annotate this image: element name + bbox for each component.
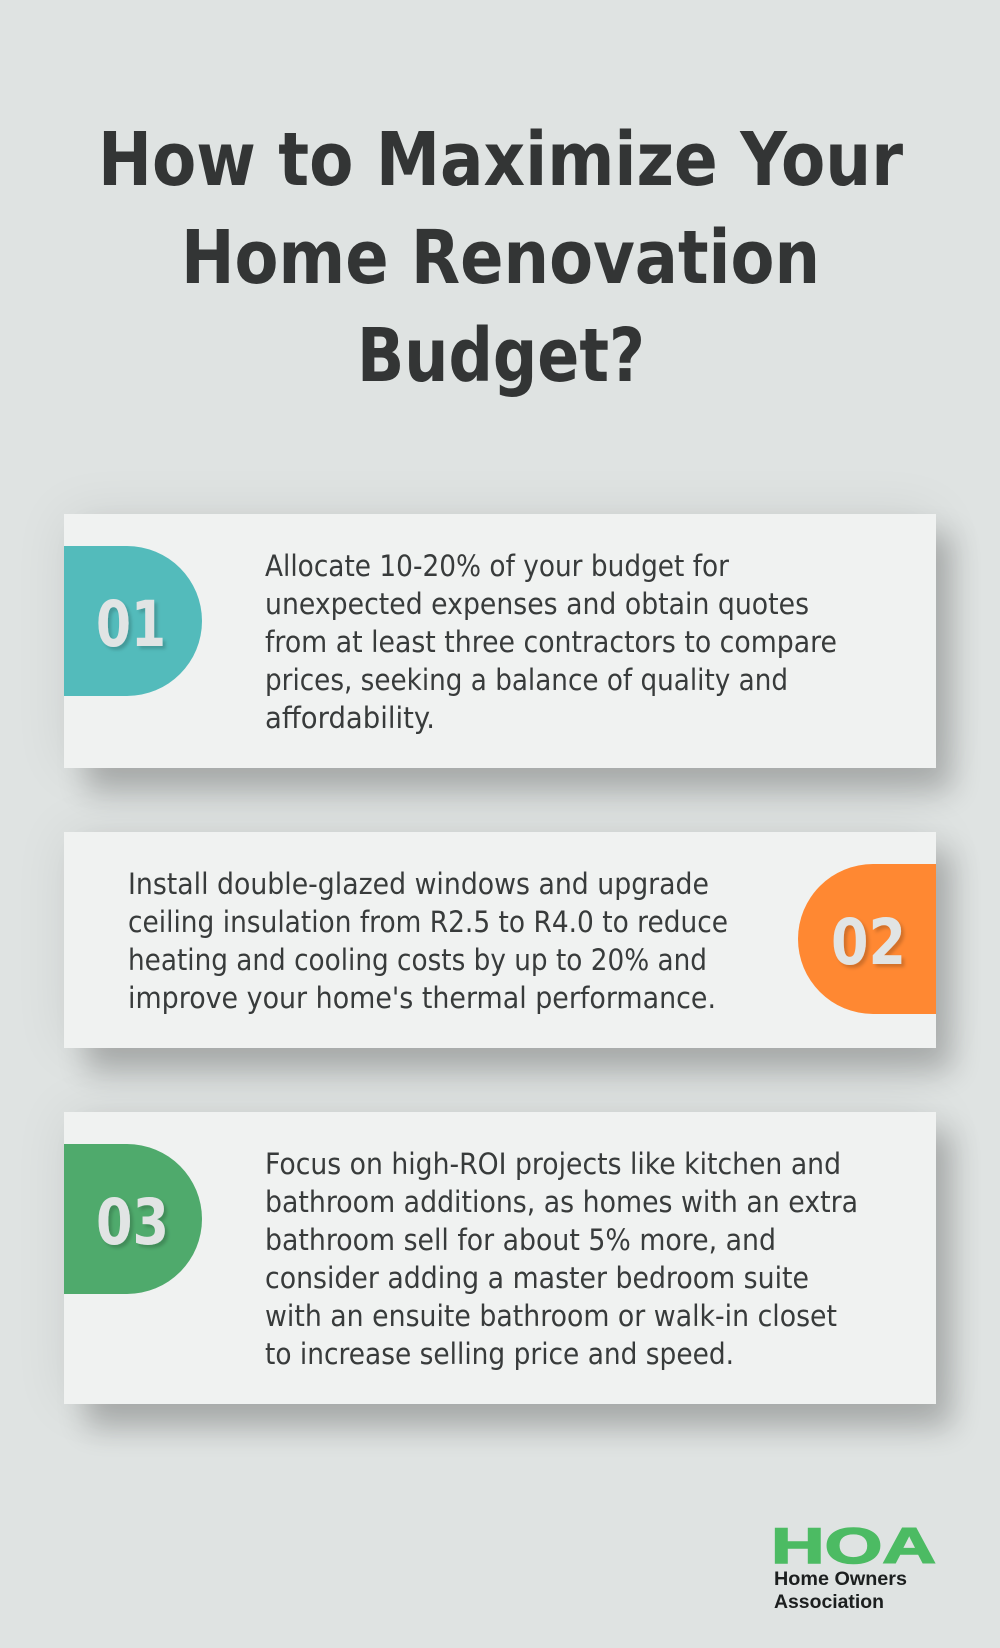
- text: step 02 description: ceiling insulation from R2.5 to R4.0 to reduce: [128, 905, 728, 939]
- title: [98, 117, 903, 399]
- text: step 01 description: from at least three contractors to compare: [265, 625, 837, 659]
- text: step 03 description: to increase selling price and speed.: [265, 1337, 734, 1371]
- text: step 02 description: [128, 867, 728, 1015]
- logo: HOA Home Owners Association: [771, 1518, 936, 1613]
- text: step 02 description: Install double-glazed windows and upgrade: [128, 867, 709, 901]
- logo: HOA Home Owners Association: HOA: [771, 1518, 936, 1574]
- text: step 03 description: bathroom sell for about 5% more, and: [265, 1223, 776, 1257]
- panel: step 02: [64, 832, 952, 1072]
- text: step 03 description: [265, 1147, 858, 1371]
- text: step 03 description: Focus on high-ROI projects like kitchen and: [265, 1147, 841, 1181]
- text: step 01 description: [265, 549, 837, 735]
- panel: step 01: [64, 514, 952, 792]
- text: step 01 description: unexpected expenses and obtain quotes: [265, 587, 809, 621]
- logo: HOA Home Owners Association: Home Owners: [774, 1568, 907, 1590]
- badge: 02: [798, 864, 936, 1014]
- title: Budget?: [357, 313, 645, 399]
- badge: 02: 02: [831, 906, 906, 979]
- text: step 02 description: heating and cooling costs by up to 20% and: [128, 943, 707, 977]
- badge: 03: 03: [96, 1186, 169, 1259]
- badge: 03: [64, 1144, 202, 1294]
- panel: step 03: [64, 1112, 952, 1428]
- title: How to Maximize Your: [98, 117, 903, 203]
- badge: 01: [64, 546, 202, 696]
- badge: 01: 01: [96, 588, 166, 661]
- text: step 01 description: prices, seeking a balance of quality and: [265, 663, 788, 697]
- text: step 03 description: with an ensuite bathroom or walk-in closet: [265, 1299, 837, 1333]
- text: step 03 description: consider adding a master bedroom suite: [265, 1261, 809, 1295]
- text: step 01 description: Allocate 10-20% of your budget for: [265, 549, 730, 583]
- text: step 01 description: affordability.: [265, 701, 435, 735]
- logo: HOA Home Owners Association: Association: [774, 1591, 884, 1613]
- title: Home Renovation: [181, 215, 820, 301]
- text: step 02 description: improve your home's thermal performance.: [128, 981, 716, 1015]
- text: step 03 description: bathroom additions, as homes with an extra: [265, 1185, 858, 1219]
